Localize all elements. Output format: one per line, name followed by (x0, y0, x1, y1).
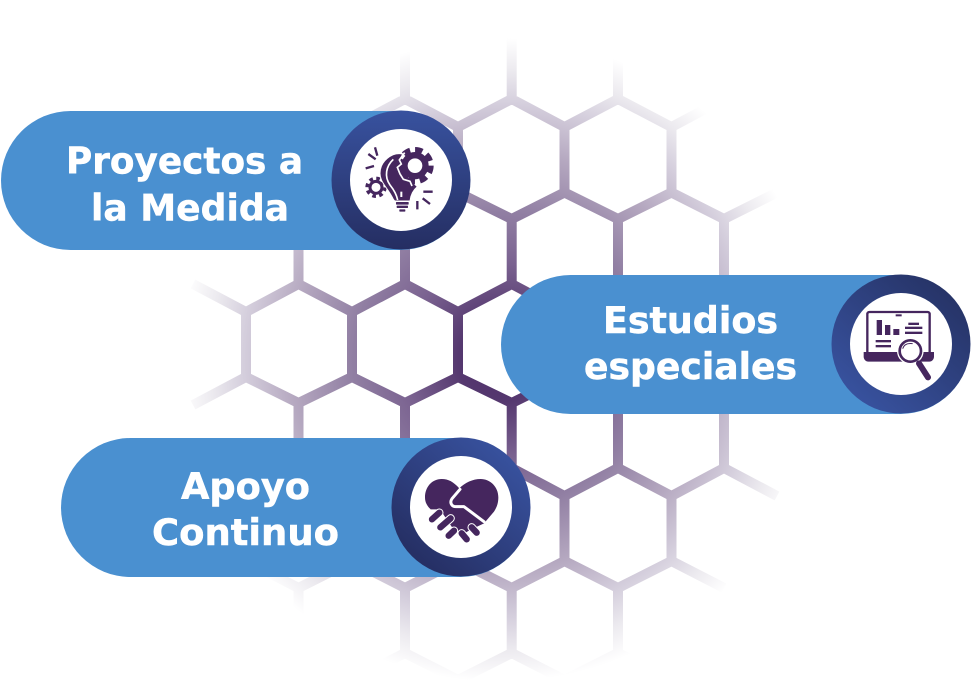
pill: Apoyo Continuo (61, 438, 530, 577)
icon disc (410, 456, 512, 558)
label: Apoyo Continuo: Apoyo (181, 465, 310, 508)
label: Apoyo Continuo: Continuo (152, 511, 339, 554)
hexagon lattice background (193, 35, 777, 680)
icon disc (850, 293, 952, 395)
label: Proyectos a la Medida (66, 140, 303, 230)
label: Estudios especiales: Estudios (603, 299, 778, 342)
label: Proyectos a la Medida: la Medida (91, 186, 289, 230)
label: Estudios especiales (584, 299, 797, 388)
icon ring (332, 110, 470, 250)
icon: lightbulb with gears (366, 147, 433, 212)
icon disc (350, 129, 452, 231)
icon: laptop with magnifier (864, 312, 934, 377)
pill: Estudios especiales (501, 274, 970, 414)
label: Proyectos a la Medida: Proyectos a (66, 140, 303, 182)
label: Estudios especiales: especiales (584, 345, 797, 388)
icon ring (832, 274, 970, 414)
pill: Proyectos a la Medida (1, 110, 470, 250)
icon ring (392, 438, 530, 576)
label: Apoyo Continuo (152, 465, 339, 554)
icon: heart handshake (425, 479, 498, 539)
